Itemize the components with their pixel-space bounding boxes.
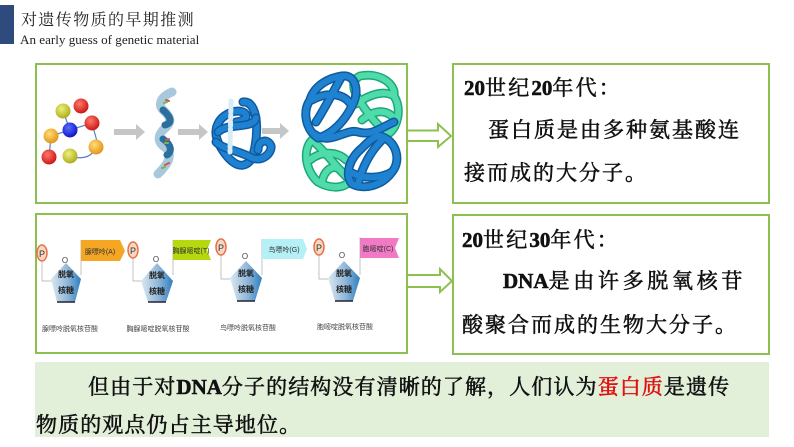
nucleotide 3: guanine: P — [218, 243, 224, 253]
1920s heading: 20世纪20年代： — [464, 76, 622, 100]
conclusion line 1: 但由于对DNA分子的结构没有清晰的了解，人们认为蛋白质是遗传 — [88, 375, 730, 399]
panel: protein structure — [35, 63, 408, 204]
nucleotide 2: thymine: P — [130, 246, 136, 256]
nucleotide 4: cytosine — [314, 237, 399, 331]
nucleotide 2: thymine: 胸腺嘧啶脱氧核苷酸 — [126, 324, 190, 333]
panel: 1930s text — [452, 214, 770, 355]
nucleotide 4: cytosine: 脱氧 — [336, 268, 352, 278]
conclusion band — [35, 362, 769, 437]
title bar icon — [0, 5, 14, 44]
1930s heading: 20世纪30年代： — [462, 228, 620, 252]
nucleotide 4: cytosine: 核糖 — [336, 284, 352, 294]
1930s body line 1: DNA是由许多脱氧核苷 — [503, 269, 746, 293]
nucleotide 1: adenine: 脱氧 — [58, 269, 74, 279]
nucleotide 2: thymine — [126, 240, 211, 333]
nucleotide 3: guanine: 脱氧 — [238, 268, 254, 278]
arrow: bottom hollow — [407, 269, 452, 292]
nucleotide 2: thymine: 脱氧 — [149, 270, 165, 280]
nucleotide 1: adenine: P — [39, 249, 45, 259]
helix — [158, 92, 172, 174]
nucleotide 1: adenine: 腺嘌呤脱氧核苷酸 — [42, 324, 98, 333]
nucleotide 2: thymine: O — [153, 255, 159, 264]
nucleotide 1: adenine: 腺嘌呤(A) — [85, 247, 115, 256]
nucleotide 3: guanine: O — [242, 252, 248, 261]
nucleotide 4: cytosine: O — [339, 251, 345, 260]
nucleotide 2: thymine: 胸腺嘧啶(T) — [173, 246, 209, 255]
nucleotide 3: guanine: 鸟嘌呤脱氧核苷酸 — [220, 323, 276, 332]
nucleotide 3: guanine — [216, 239, 307, 332]
conclusion line 2: 物质的观点仍占主导地位。 — [36, 413, 301, 437]
nucleotide 4: cytosine: P — [316, 243, 322, 253]
gray process arrows — [114, 123, 289, 140]
arrow: top hollow — [407, 124, 451, 147]
nucleotide 4: cytosine: 胞嘧啶(C) — [363, 244, 393, 253]
nucleotide 1: adenine: 核糖 — [58, 285, 74, 295]
1920s body line 1: 蛋白质是由多种氨基酸连 — [488, 118, 741, 142]
title: 对遗传物质的早期推测 — [21, 12, 195, 29]
1920s body line 2: 接而成的大分子。 — [464, 161, 648, 185]
nucleotide 2: thymine: 核糖 — [149, 286, 165, 296]
amino acid chain — [42, 98, 104, 164]
nucleotide 4: cytosine: 胞嘧啶脱氧核苷酸 — [317, 322, 373, 331]
panel: nucleotides — [35, 213, 408, 354]
tertiary fold — [216, 101, 271, 165]
quaternary structure — [306, 75, 398, 187]
nucleotide 3: guanine: 核糖 — [238, 284, 254, 294]
1930s body line 2: 酸聚合而成的生物大分子。 — [462, 313, 738, 337]
nucleotide 1: adenine: O — [62, 256, 68, 265]
panel: 1920s text — [452, 63, 770, 204]
nucleotide 3: guanine: 鸟嘌呤(G) — [268, 245, 300, 254]
nucleotide 1: adenine — [37, 240, 125, 333]
subtitle: An early guess of genetic material — [20, 32, 199, 47]
